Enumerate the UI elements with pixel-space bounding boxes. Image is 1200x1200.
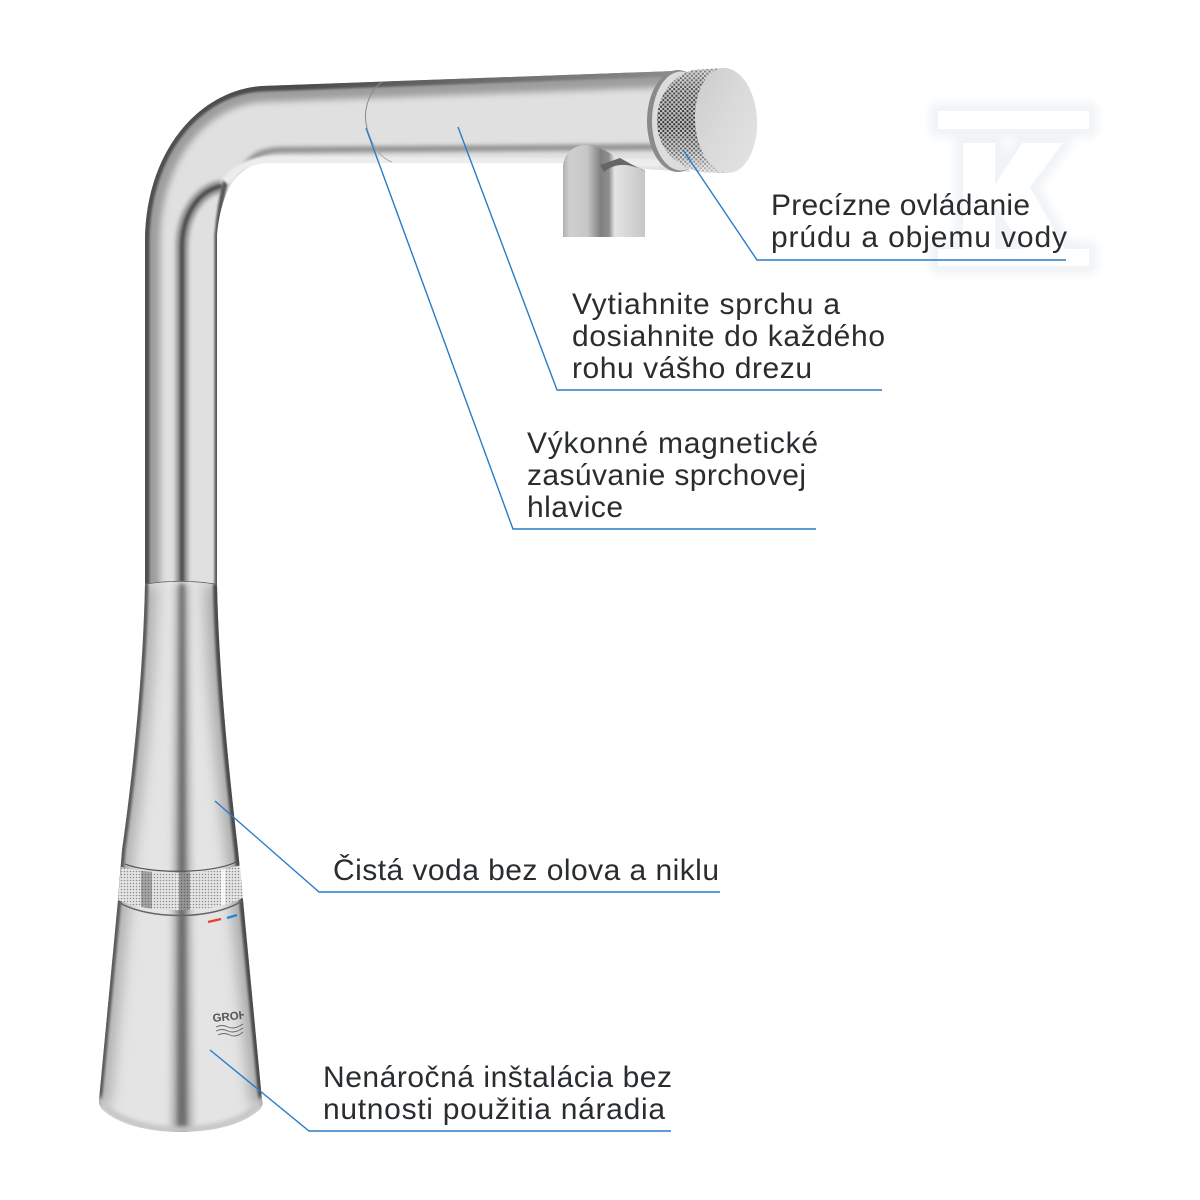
callout: easy installation: Nenáročná inštalácia bez — [323, 1061, 672, 1094]
faucet: lower tapered body — [99, 581, 262, 1132]
faucet — [90, 60, 760, 1138]
callout: pull-out shower: dosiahnite do každého — [572, 320, 885, 353]
watermark: K logo — [938, 111, 1089, 266]
callout: magnetic docking — [366, 128, 818, 529]
faucet: knurled base ring — [118, 860, 243, 920]
callout: water control: prúdu a objemu vody — [771, 221, 1067, 254]
icon: hot and cold marks — [208, 915, 237, 922]
callout: magnetic docking: zasúvanie sprchovej — [527, 459, 806, 492]
callout: clean water: Čistá voda bez olova a niklu — [333, 853, 719, 887]
callout: easy installation — [210, 1050, 672, 1131]
logo: GROHE: GROHE — [212, 1009, 256, 1025]
logo: GROHE — [213, 1011, 244, 1036]
faucet: control knob — [647, 66, 760, 175]
faucet: upper tube and bend — [145, 71, 690, 584]
callout: pull-out shower: Vytiahnite sprchu a — [572, 288, 840, 321]
faucet: spout outlet — [563, 145, 647, 237]
callout: water control — [683, 150, 1067, 260]
callout: water control: Precízne ovládanie — [771, 189, 1030, 222]
callout: easy installation: nutnosti použitia náradia — [323, 1093, 665, 1126]
callout: clean water — [215, 801, 720, 892]
callout: magnetic docking: hlavice — [527, 491, 623, 524]
callout: pull-out shower: rohu vášho drezu — [572, 352, 812, 385]
callout: pull-out shower — [458, 127, 885, 390]
callout: magnetic docking: Výkonné magnetické — [527, 427, 818, 460]
